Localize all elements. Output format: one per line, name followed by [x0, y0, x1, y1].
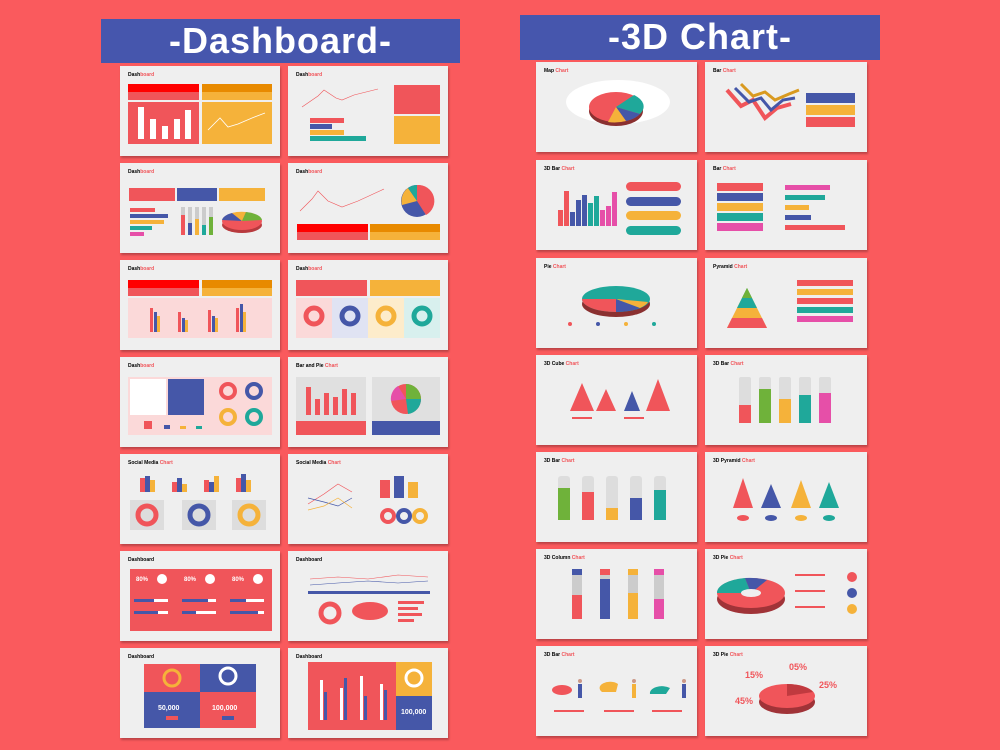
slide: 3D pie percents [705, 646, 867, 736]
slide: 3D pie percents: 25% [819, 680, 837, 690]
slide: dashboard 6 [288, 260, 448, 350]
slide: dashboard quadrants: 50,000 [158, 705, 180, 712]
slide: dashboard 3: Dashboard [128, 169, 154, 175]
slide: 3D cube chart: 3D Cube Chart [544, 361, 579, 367]
slide: dashboard bars: Dashboard [296, 654, 322, 660]
slide: 3D bar people: 3D Bar Chart [544, 652, 575, 658]
slide: 3D bar chart [536, 160, 697, 250]
slide: dashboard quadrants: Dashboard [128, 654, 154, 660]
slide: dashboard social: 80% [136, 577, 149, 583]
slide: bar chart ribbons: Bar Chart [713, 68, 736, 74]
slide: 3D bar tubes 1 [705, 355, 867, 445]
slide: social media chart 1: Social Media Chart [128, 460, 173, 466]
slide: dashboard social: Dashboard [128, 557, 154, 563]
slide: pie chart [536, 258, 697, 348]
title: 3D Chart: -3D Chart- [608, 16, 792, 57]
title: Dashboard [101, 19, 460, 63]
slide: 3D pie percents: 15% [745, 670, 763, 680]
slide: dashboard 7 [120, 357, 280, 447]
slide: bar chart ribbons [705, 62, 867, 152]
slide: bar and pie chart [288, 357, 448, 447]
slide: dashboard quadrants [120, 648, 280, 738]
slide: social media chart 1 [120, 454, 280, 544]
slide: 3D pyramid chart: 3D Pyramid Chart [713, 458, 755, 464]
slide: dashboard map: Dashboard [296, 557, 322, 563]
title: 3D Chart [520, 15, 880, 60]
slide: dashboard 5 [120, 260, 280, 350]
slide: dashboard 3 [120, 163, 280, 253]
slide: 3D pie percents: 45% [735, 696, 753, 706]
slide: 3D bar tubes 1: 3D Bar Chart [713, 361, 744, 367]
slide: bar and pie chart: Bar and Pie Chart [296, 363, 338, 369]
slide: pie chart: Pie Chart [544, 264, 566, 270]
slide: 3D pie percents: 05% [789, 662, 807, 672]
slide: map chart: Map Chart [544, 68, 569, 74]
slide: 3D column chart [536, 549, 697, 639]
slide: 3D pie donut: 3D Pie Chart [713, 555, 743, 561]
slide: 3D bar tubes 2: 3D Bar Chart [544, 458, 575, 464]
slide: dashboard map [288, 551, 448, 641]
slide: dashboard social [120, 551, 280, 641]
slide: 3D cube chart [536, 355, 697, 445]
slide: dashboard bars: 100,000 [401, 709, 426, 716]
slide: bar chart horizontal: Bar Chart [713, 166, 736, 172]
slide: dashboard bars [288, 648, 448, 738]
slide: 3D bar people [536, 646, 697, 736]
slide: dashboard 1: Dashboard [128, 72, 154, 78]
slide: pyramid chart: Pyramid Chart [713, 264, 748, 270]
slide: social media chart 2 [288, 454, 448, 544]
slide: map chart [536, 62, 697, 152]
title: Dashboard: -Dashboard- [169, 20, 392, 61]
slide: bar chart horizontal [705, 160, 867, 250]
slide: dashboard 7: Dashboard [128, 363, 154, 369]
slide: dashboard 4 [288, 163, 448, 253]
slide: dashboard 1 [120, 66, 280, 156]
slide: 3D bar chart: 3D Bar Chart [544, 166, 575, 172]
slide: social media chart 2: Social Media Chart [296, 460, 341, 466]
slide: 3D column chart: 3D Column Chart [544, 555, 585, 561]
slide: dashboard 5: Dashboard [128, 266, 154, 272]
slide: dashboard social: 80% [184, 577, 197, 583]
slide: 3D pie donut [705, 549, 867, 639]
slide: 3D pie percents: 3D Pie Chart [713, 652, 743, 658]
slide: pyramid chart [705, 258, 867, 348]
slide: 3D pyramid chart [705, 452, 867, 542]
slide: dashboard 6: Dashboard [296, 266, 322, 272]
slide: dashboard social: 80% [232, 577, 245, 583]
slide: 3D bar tubes 2 [536, 452, 697, 542]
slide: dashboard 2 [288, 66, 448, 156]
slide: dashboard 2: Dashboard [296, 72, 322, 78]
slide: dashboard 4: Dashboard [296, 169, 322, 175]
slide: dashboard quadrants: 100,000 [212, 705, 237, 712]
